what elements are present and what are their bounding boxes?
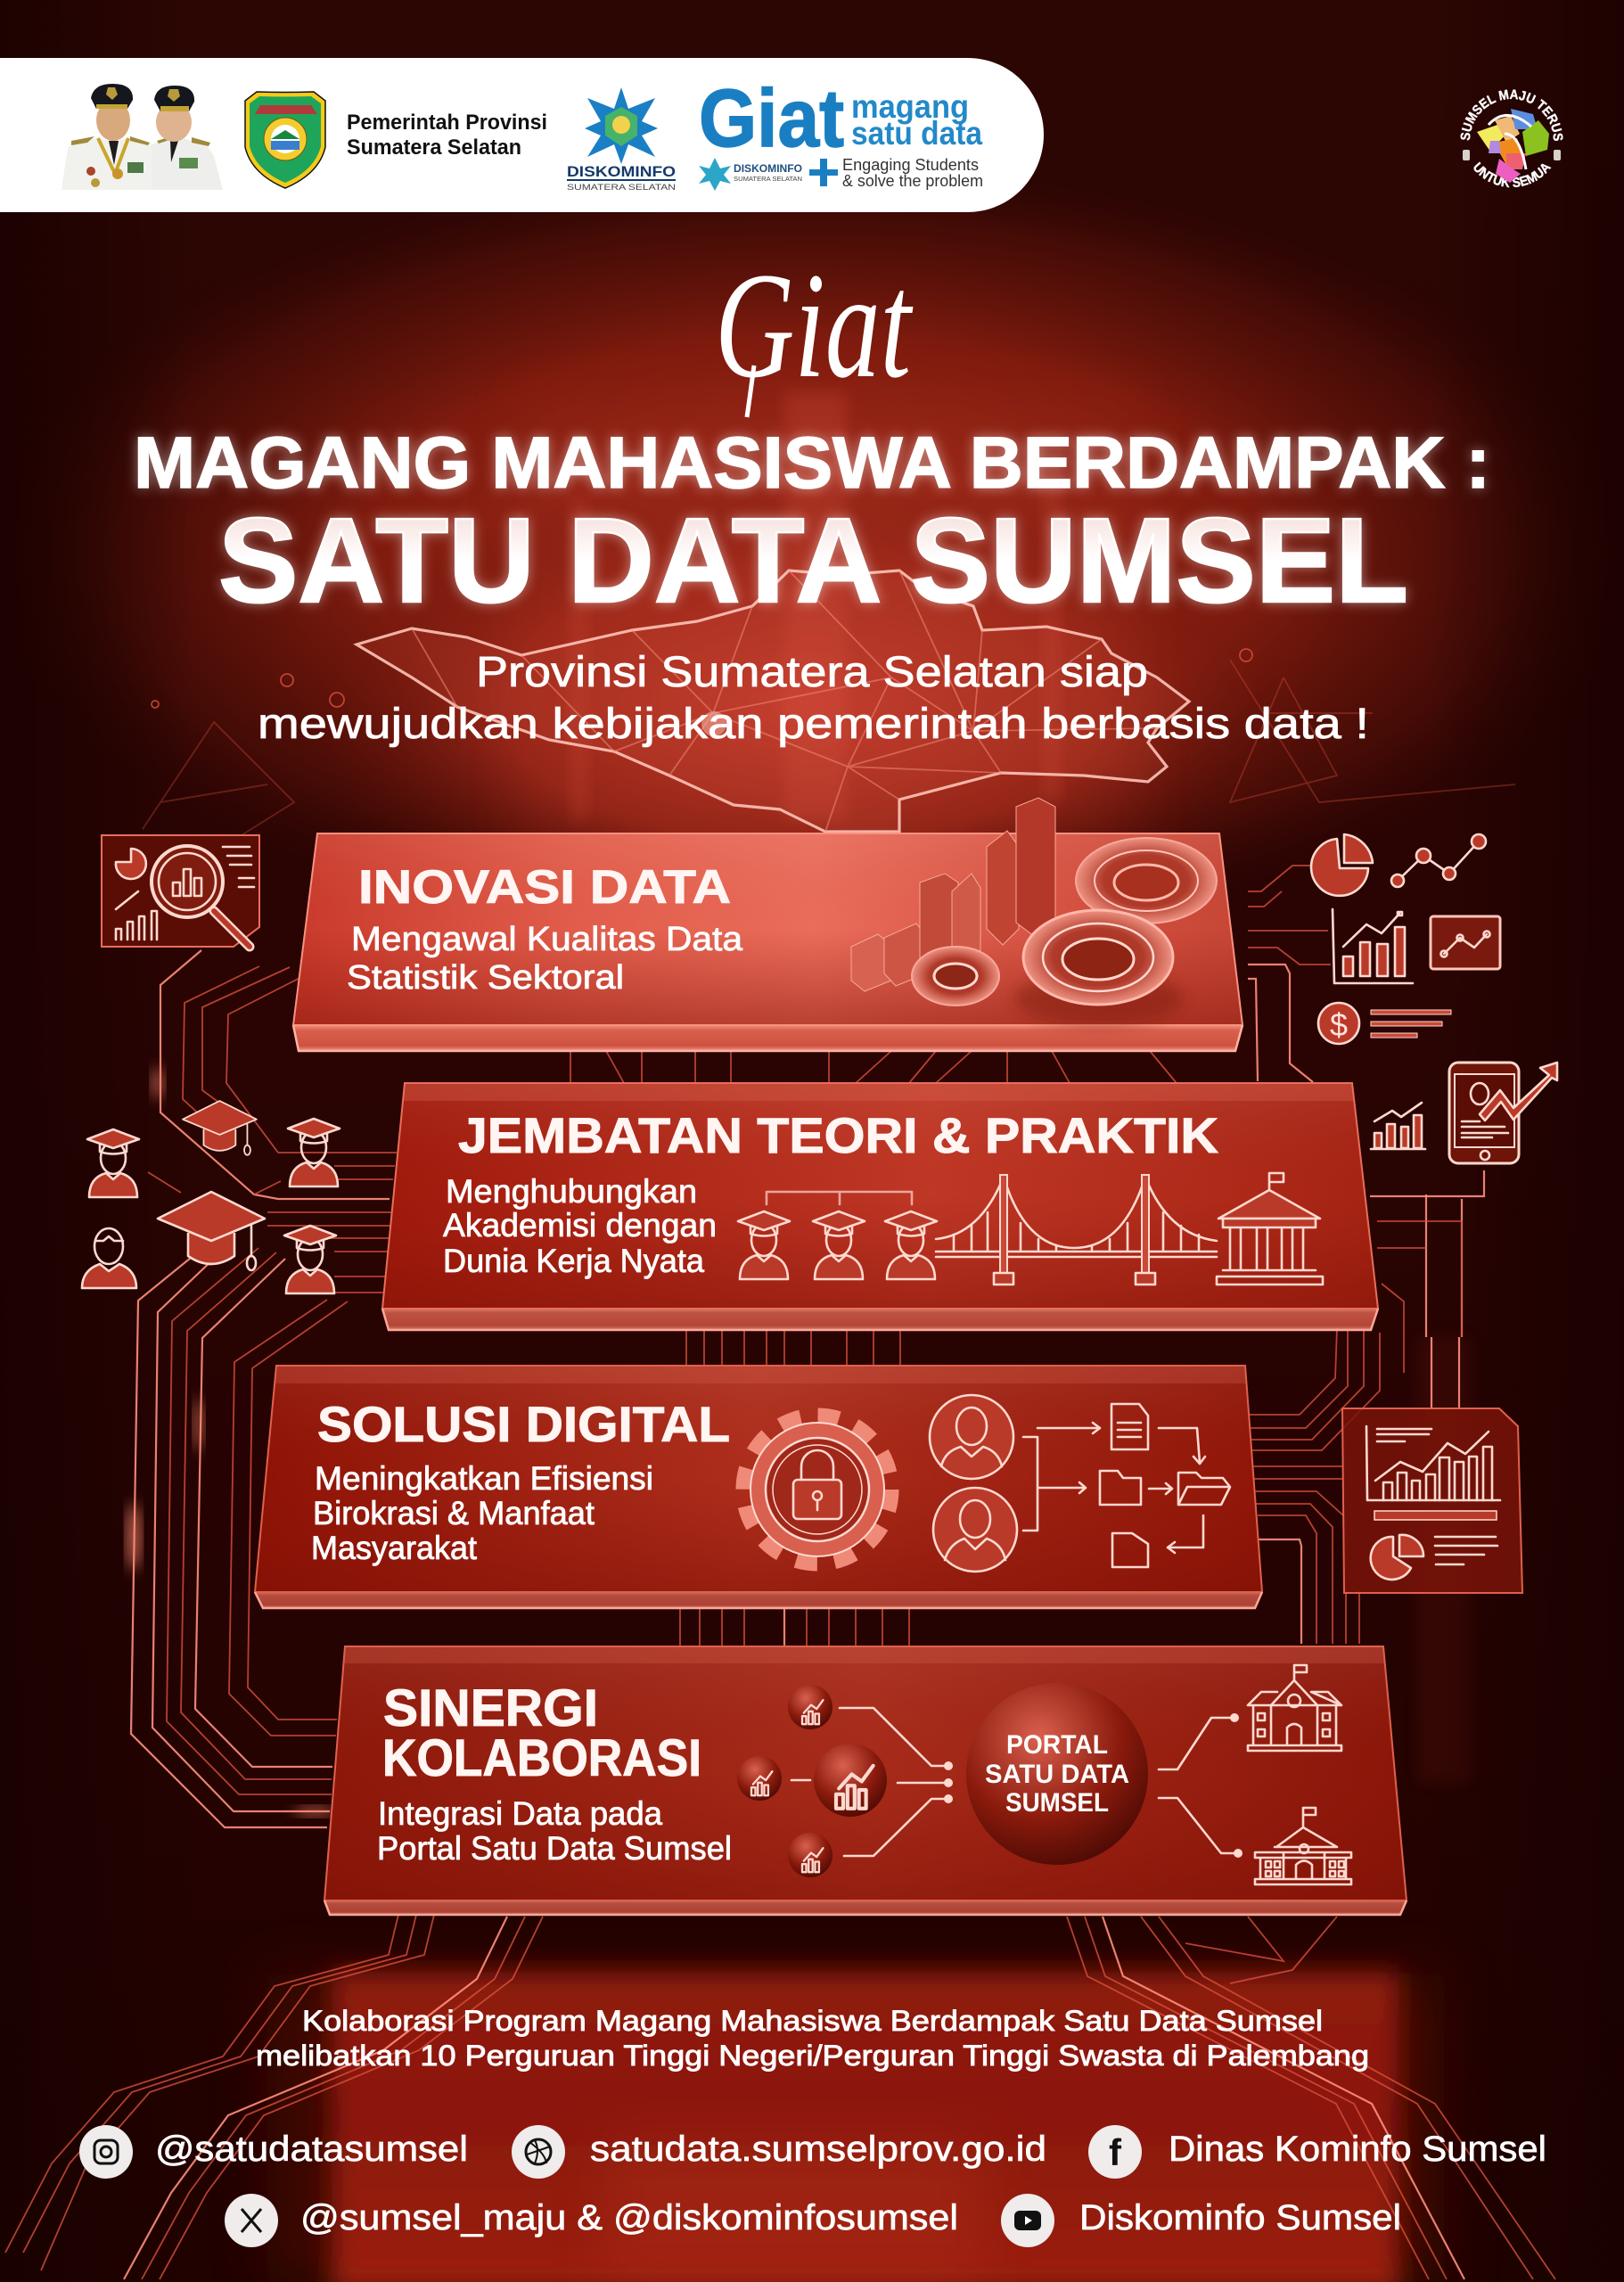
- heading: KOLABORASI: [382, 1729, 701, 1787]
- main title: MAGANG MAHASISWA BERDAMPAK :: [134, 423, 1490, 504]
- social: instagram: [79, 2125, 468, 2179]
- icon: magnifier data card: [102, 835, 259, 947]
- portal sphere: [966, 1683, 1148, 1865]
- government name: [347, 111, 547, 160]
- icon: student right upper: [288, 1119, 340, 1186]
- icon: student left: [87, 1129, 139, 1197]
- sumsel maju terus logo: SUMSEL MAJU TERUS: [1460, 89, 1563, 141]
- panel: solusi digital: [255, 1366, 1262, 1608]
- giat magang satu data logo: satu data: [851, 115, 982, 152]
- social: website: satudata.sumselprov.go.id: [590, 2130, 1046, 2169]
- giat magang satu data logo: & solve the problem: [842, 172, 983, 190]
- heading: INOVASI DATA: [358, 861, 731, 914]
- body text: Statistik Sektoral: [347, 959, 624, 997]
- provincial coat of arms: [245, 92, 325, 188]
- panel: jembatan teori dan praktik: [382, 1083, 1378, 1330]
- footer note: melibatkan 10 Perguruan Tinggi Negeri/Perguran Tinggi Swasta di Palembang: [256, 2040, 1369, 2072]
- giat magang satu data logo: [699, 73, 983, 191]
- heading: SOLUSI DIGITAL: [317, 1396, 730, 1452]
- portal sphere: PORTAL: [1006, 1730, 1108, 1760]
- icon: monitor with chart: [1431, 916, 1500, 969]
- footer note: Kolaborasi Program Magang Mahasiswa Berdampak Satu Data Sumsel: [302, 2005, 1323, 2037]
- icon: bar chart: [1333, 909, 1413, 983]
- main title: SATU DATA SUMSEL: [218, 493, 1408, 628]
- giat magang satu data logo: magang: [851, 88, 969, 125]
- giat magang satu data logo: Engaging Students: [842, 156, 979, 174]
- 3d bars and rings: [851, 798, 1217, 1025]
- icon: person lower left: [82, 1228, 136, 1288]
- heading: [382, 1679, 701, 1787]
- diskominfo logo: SUMATERA SELATAN: [567, 183, 676, 192]
- heading: JEMBATAN TEORI & PRAKTIK: [458, 1107, 1218, 1163]
- sumsel maju terus logo: [1460, 89, 1563, 187]
- subtitle: mewujudkan kebijakan pemerintah berbasis data !: [258, 701, 1369, 748]
- chart card right: [1342, 1408, 1522, 1593]
- social: instagram: @satudatasumsel: [155, 2130, 468, 2169]
- government name: Pemerintah Provinsi: [347, 111, 547, 135]
- social: facebook: Dinas Kominfo Sumsel: [1169, 2130, 1546, 2169]
- body text: Integrasi Data pada: [378, 1795, 662, 1832]
- icon: university bottom: [1255, 1808, 1351, 1884]
- diskominfo logo: DISKOMINFO: [567, 163, 676, 180]
- icon: line nodes: [1391, 834, 1486, 887]
- social: facebook: [1088, 2125, 1546, 2179]
- students, bridge and building: [738, 1173, 1323, 1285]
- two persons: [930, 1395, 1017, 1572]
- diskominfo logo: [567, 87, 676, 192]
- icon: tablet with arrow: [1449, 1063, 1557, 1163]
- giat magang satu data logo: SUMATERA SELATAN: [734, 176, 802, 183]
- icon: student right lower: [284, 1226, 336, 1293]
- icon: small growth chart: [1371, 1103, 1425, 1149]
- body text: Akademisi dengan: [443, 1207, 717, 1244]
- heading: SINERGI: [383, 1679, 598, 1737]
- social: x: [225, 2194, 958, 2247]
- icon: graduation cap large: [158, 1192, 265, 1270]
- data spheres and connectors: [737, 1685, 1243, 1877]
- icon: dollar list: [1318, 1003, 1451, 1044]
- body text: [443, 1173, 717, 1279]
- body text: Portal Satu Data Sumsel: [377, 1830, 732, 1867]
- body text: Menghubungkan: [446, 1173, 697, 1210]
- officials portraits: [62, 84, 223, 190]
- body text: [311, 1460, 653, 1566]
- subtitle: Provinsi Sumatera Selatan siap: [476, 649, 1148, 696]
- subtitle: [258, 649, 1369, 748]
- panel: sinergi kolaborasi: [324, 1646, 1407, 1915]
- icon: dollar list: $: [1330, 1006, 1348, 1043]
- portal sphere: SATU DATA: [985, 1760, 1129, 1789]
- body text: Meningkatkan Efisiensi: [315, 1460, 653, 1497]
- header band: [0, 58, 1044, 212]
- social: facebook: f: [1109, 2131, 1122, 2173]
- map of South Sumatra outline with network: [143, 570, 1515, 847]
- portal sphere: SUMSEL: [1005, 1788, 1109, 1818]
- body text: Masyarakat: [311, 1530, 478, 1566]
- giat magang satu data logo: DISKOMINFO: [734, 162, 802, 175]
- footer note: [256, 2005, 1369, 2072]
- social: website: [512, 2125, 1046, 2179]
- icon: pie chart: [1311, 834, 1373, 896]
- document workflow: [1023, 1404, 1230, 1567]
- body text: [347, 921, 743, 997]
- body text: Birokrasi & Manfaat: [313, 1495, 595, 1531]
- social: youtube: [1001, 2194, 1401, 2247]
- giat magang satu data logo: Giat: [699, 73, 844, 164]
- panel: inovasi data: [293, 798, 1243, 1051]
- circuit lines: [5, 866, 1555, 2279]
- social: youtube: Diskominfo Sumsel: [1079, 2198, 1401, 2237]
- gear with padlock: [743, 1416, 891, 1564]
- body text: Mengawal Kualitas Data: [351, 921, 743, 958]
- social: x: @sumsel_maju & @diskominfosumsel: [300, 2198, 958, 2237]
- body text: [377, 1795, 732, 1867]
- script heading: Giat: Giat: [715, 242, 914, 409]
- icon: graduation cap small: [183, 1101, 257, 1155]
- icon: university top: [1248, 1665, 1341, 1751]
- body text: Dunia Kerja Nyata: [443, 1243, 704, 1279]
- government name: Sumatera Selatan: [347, 135, 521, 160]
- sumsel maju terus logo: UNTUK SEMUA: [1474, 162, 1551, 187]
- main title: [134, 423, 1490, 628]
